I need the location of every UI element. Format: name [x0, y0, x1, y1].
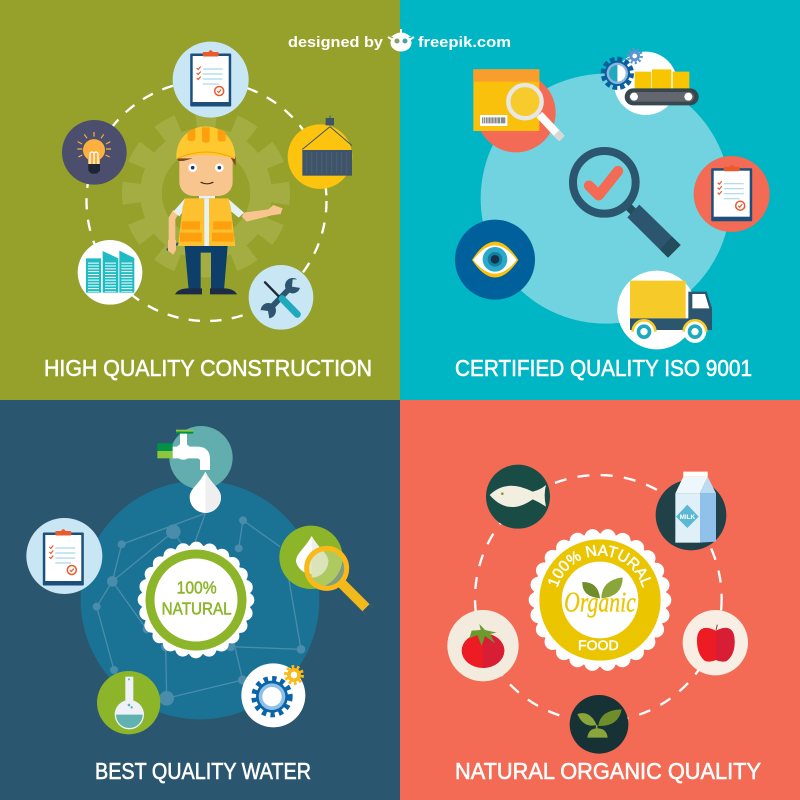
- vest: [178, 198, 235, 246]
- certified illustration: [455, 49, 770, 349]
- hand: [168, 240, 176, 255]
- credit: freepik logo mascot: [388, 29, 414, 52]
- credit: designed by: designed by: [288, 35, 383, 51]
- icon: clipboard: [711, 165, 752, 221]
- icon: cargo container: [288, 116, 352, 189]
- icon: tomato: [447, 610, 519, 681]
- icon: sprout: [570, 695, 628, 754]
- icon: milk carton: [656, 472, 726, 550]
- icon: clipboard circle: [26, 518, 102, 594]
- icon: milk carton: MILK: [680, 514, 695, 521]
- icon: tap and drop: [157, 426, 233, 513]
- icon: magnifier with check: [573, 151, 681, 258]
- icon: package inspection: [473, 69, 562, 152]
- icon: apple: [683, 610, 748, 675]
- icon: drop under magnifier: [279, 526, 371, 612]
- panel: best quality water: [0, 400, 400, 800]
- water illustration: [26, 426, 371, 734]
- icon: clipboard: [43, 529, 84, 586]
- icon: buildings: [78, 240, 142, 305]
- icon: fish: [486, 465, 550, 529]
- badge: organic food: [528, 529, 672, 671]
- title: NATURAL ORGANIC QUALITY: [455, 758, 761, 784]
- badge: 100% natural: 100%: [177, 578, 217, 598]
- badge: organic food: FOOD: [578, 638, 619, 653]
- sleeves: [173, 198, 244, 218]
- panel: certified quality iso 9001: [288, 0, 800, 400]
- icon: gears: [241, 663, 305, 727]
- hair: [177, 157, 236, 166]
- icon: clipboard: [190, 50, 231, 106]
- vest pockets: [180, 221, 234, 242]
- credit: freepik.com: freepik.com: [418, 35, 511, 51]
- eyes and smile: [188, 163, 224, 184]
- helmet: [176, 126, 235, 159]
- badge: organic food: 100% NATURAL: [548, 544, 652, 588]
- background gear: [131, 119, 281, 268]
- title: BEST QUALITY WATER: [95, 758, 311, 784]
- icon: delivery truck: [617, 271, 712, 349]
- icon: conveyor and gears: [603, 49, 699, 115]
- panel: high quality construction: [0, 0, 400, 400]
- dashed ring: [86, 81, 326, 321]
- icon: flask: [97, 671, 160, 734]
- construction illustration: [62, 42, 352, 330]
- network graph: [93, 513, 305, 706]
- panel: natural organic quality: [400, 400, 800, 800]
- face: [179, 145, 233, 196]
- icon: clipboard circle: [173, 42, 249, 118]
- dashed ring: [475, 475, 722, 722]
- icon: eye: [455, 220, 535, 300]
- title: CERTIFIED QUALITY ISO 9001: [455, 355, 752, 381]
- worker figure: [167, 126, 283, 294]
- icon: wrench and screwdriver: [249, 265, 313, 330]
- icon: clipboard circle: [694, 156, 770, 232]
- icon: light bulb: [62, 120, 127, 185]
- shoes: [175, 288, 237, 294]
- small wrench: [167, 242, 182, 250]
- badge: 100% natural: [141, 545, 251, 655]
- left arm: [172, 212, 176, 247]
- large blue circle: [81, 481, 319, 719]
- title: HIGH QUALITY CONSTRUCTION: [44, 355, 372, 381]
- badge: 100% natural: NATURAL: [162, 599, 232, 619]
- large light circle: [481, 74, 731, 324]
- organic illustration: [447, 464, 748, 754]
- badge: organic food: Organic: [564, 588, 636, 619]
- right arm: [242, 205, 283, 222]
- trousers: [185, 246, 228, 290]
